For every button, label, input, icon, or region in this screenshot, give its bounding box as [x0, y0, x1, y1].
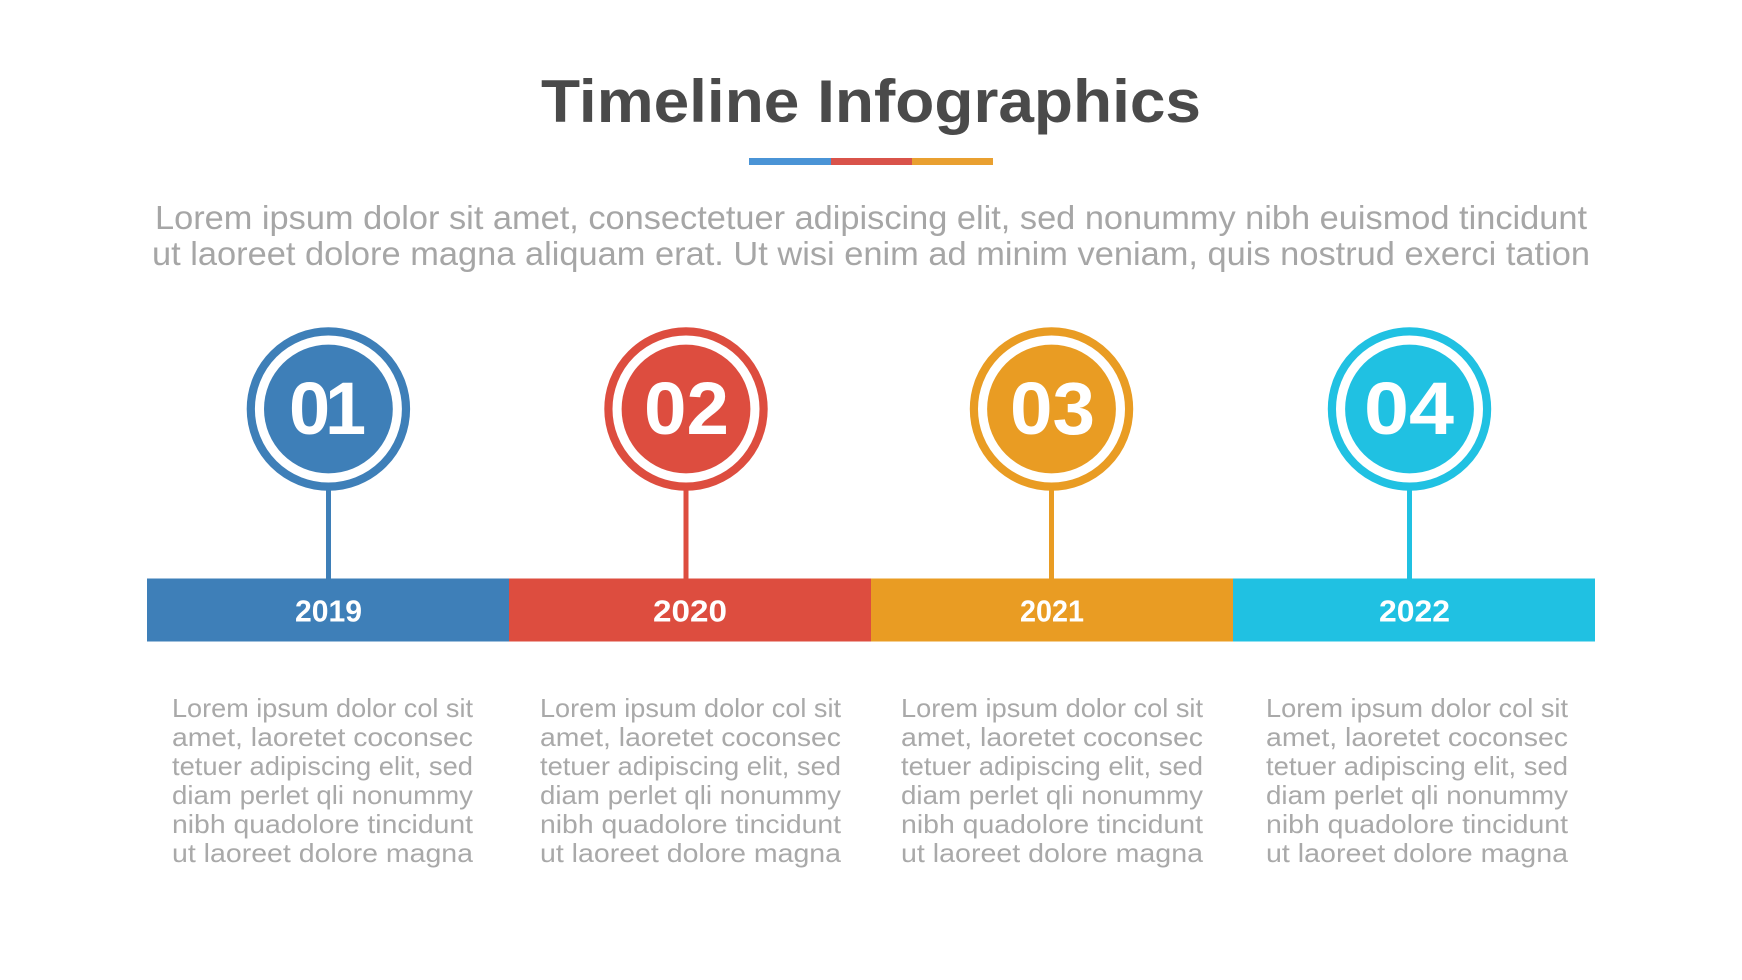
- description 04: Lorem ipsum dolor col sit: [1266, 693, 1569, 723]
- icon: numbered circle 04: 04: [1364, 367, 1454, 450]
- icon: numbered circle 03: 03: [1010, 367, 1095, 450]
- description 01: amet, laoretet coconsec: [172, 722, 473, 752]
- subtitle text block: [152, 199, 1590, 272]
- panel: step 01, 2019: [147, 331, 509, 868]
- description 03: tetuer adipiscing elit, sed: [901, 751, 1203, 781]
- panel: step 02, 2020: [509, 331, 871, 868]
- description 02: [540, 693, 842, 868]
- description 04: [1266, 693, 1569, 868]
- description 02: diam perlet qli nonummy: [540, 780, 841, 810]
- icon: numbered circle 02: [608, 331, 764, 487]
- title: Timeline Infographics: [541, 68, 1201, 135]
- description 03: Lorem ipsum dolor col sit: [901, 693, 1204, 723]
- description 03: diam perlet qli nonummy: [901, 780, 1203, 810]
- timeline bar segment 2022: [1233, 578, 1595, 642]
- timeline bar segment 2021: [871, 578, 1233, 642]
- description 01: diam perlet qli nonummy: [172, 780, 473, 810]
- description 01: [172, 693, 474, 868]
- subtitle text block: ut laoreet dolore magna aliquam erat. Ut wisi enim ad minim veniam, quis nostrud exerci tation: [152, 235, 1590, 272]
- timeline bar segment 2019: 2019: [295, 594, 362, 628]
- timeline bar segment 2022: 2022: [1379, 594, 1450, 628]
- subtitle text block: Lorem ipsum dolor sit amet, consectetuer adipiscing elit, sed nonummy nibh euismod tincidunt: [155, 199, 1587, 236]
- description 04: nibh quadolore tincidunt: [1266, 809, 1569, 839]
- description 02: nibh quadolore tincidunt: [540, 809, 842, 839]
- description 03: nibh quadolore tincidunt: [901, 809, 1204, 839]
- description 04: ut laoreet dolore magna: [1266, 838, 1569, 868]
- description 03: ut laoreet dolore magna: [901, 838, 1204, 868]
- icon: numbered circle 03: [974, 331, 1129, 487]
- connector stem 02: [684, 488, 688, 580]
- icon: numbered circle 01: [251, 331, 406, 487]
- timeline bar segment 2020: [509, 578, 871, 642]
- title underline: [749, 158, 993, 165]
- icon: numbered circle 04: [1332, 331, 1487, 487]
- timeline bar segment 2020: 2020: [653, 594, 727, 628]
- description 03: [901, 693, 1204, 868]
- description 01: Lorem ipsum dolor col sit: [172, 693, 474, 723]
- connector stem 04: [1407, 488, 1412, 580]
- connector stem 03: [1049, 488, 1054, 580]
- description 01: tetuer adipiscing elit, sed: [172, 751, 473, 781]
- panel: step 03, 2021: [871, 331, 1233, 868]
- description 02: ut laoreet dolore magna: [540, 838, 842, 868]
- description 01: ut laoreet dolore magna: [172, 838, 474, 868]
- panel: step 04, 2022: [1233, 331, 1595, 868]
- icon: numbered circle 01: 01: [289, 367, 366, 450]
- description 01: nibh quadolore tincidunt: [172, 809, 474, 839]
- description 02: amet, laoretet coconsec: [540, 722, 841, 752]
- connector stem 01: [326, 488, 331, 580]
- timeline bar segment 2021: 2021: [1020, 594, 1084, 628]
- description 02: Lorem ipsum dolor col sit: [540, 693, 842, 723]
- icon: numbered circle 02: 02: [644, 367, 729, 450]
- description 04: diam perlet qli nonummy: [1266, 780, 1568, 810]
- description 03: amet, laoretet coconsec: [901, 722, 1203, 752]
- description 02: tetuer adipiscing elit, sed: [540, 751, 841, 781]
- description 04: amet, laoretet coconsec: [1266, 722, 1568, 752]
- timeline bar segment 2019: [147, 578, 509, 642]
- description 04: tetuer adipiscing elit, sed: [1266, 751, 1568, 781]
